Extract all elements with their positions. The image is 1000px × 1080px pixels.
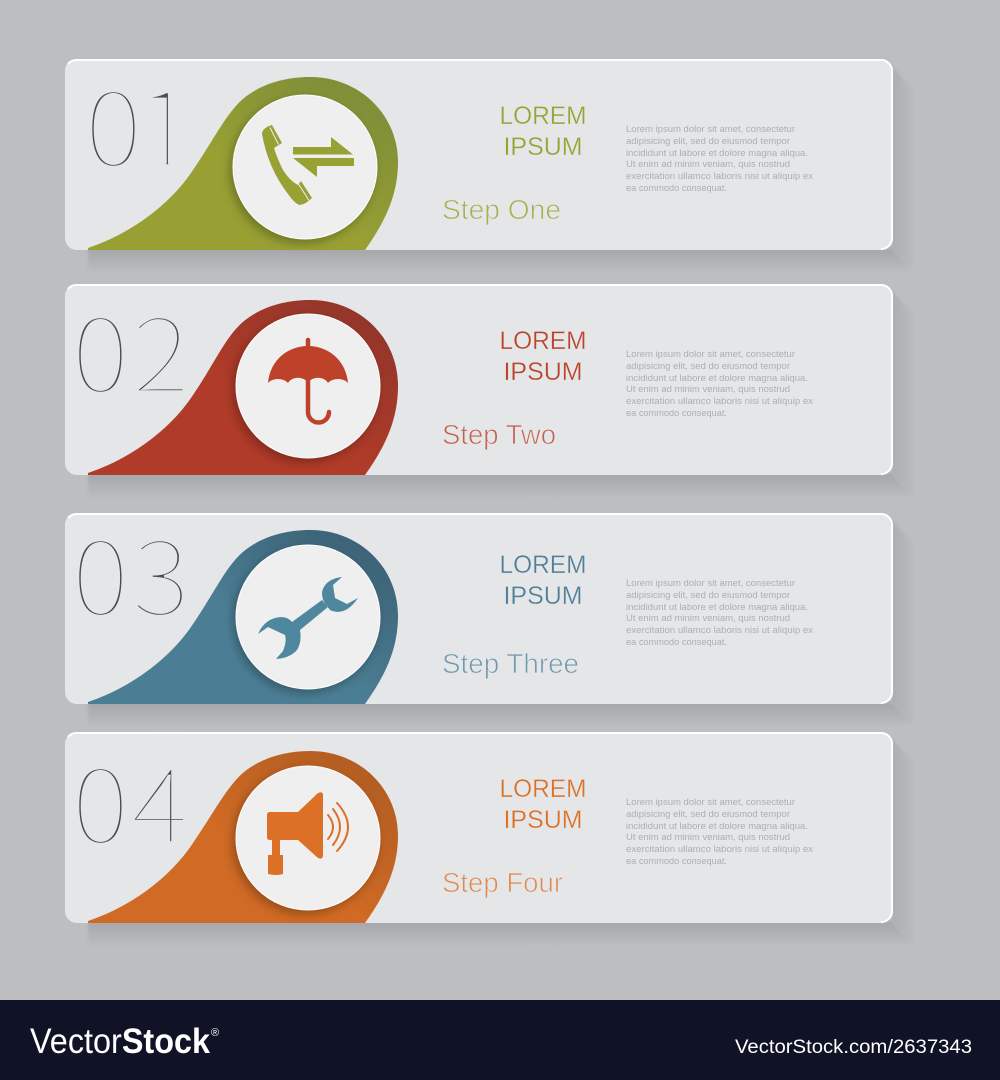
body text: Ut enim ad minim veniam, quis nostrud bbox=[626, 159, 790, 169]
teardrop shape bbox=[88, 77, 398, 250]
body text: ea commodo consequat. bbox=[626, 408, 727, 418]
number 02: 02 bbox=[72, 275, 189, 421]
icon circle bbox=[236, 314, 380, 458]
number 03: 03 bbox=[72, 498, 189, 644]
heading: LOREM bbox=[500, 775, 586, 803]
teardrop shape bbox=[88, 530, 398, 704]
body text: ea commodo consequat. bbox=[626, 856, 727, 866]
body text bbox=[626, 349, 814, 418]
panel: step two card: IPSUM bbox=[504, 358, 582, 386]
body text: Lorem ipsum dolor sit amet, consectetur bbox=[626, 349, 795, 359]
icon circle bbox=[236, 766, 380, 910]
body text: exercitation ullamco laboris nisi ut aliquip ex bbox=[626, 844, 814, 854]
teardrop shape bbox=[88, 300, 398, 475]
body text: Ut enim ad minim veniam, quis nostrud bbox=[626, 832, 790, 842]
step label: Step One bbox=[442, 194, 561, 225]
heading: LOREM bbox=[500, 102, 586, 130]
body text: ea commodo consequat. bbox=[626, 637, 727, 647]
step label: Step Three bbox=[442, 648, 579, 679]
icon: umbrella bbox=[268, 340, 348, 422]
body text: Lorem ipsum dolor sit amet, consectetur bbox=[626, 797, 795, 807]
body text: incididunt ut labore et dolore magna aliqua. bbox=[626, 148, 808, 158]
body text bbox=[626, 578, 814, 647]
number 01: 01 bbox=[85, 49, 194, 195]
registered mark: ® bbox=[211, 1027, 219, 1039]
body text: adipisicing elit, sed do eiusmod tempor bbox=[626, 809, 790, 819]
body text bbox=[626, 124, 814, 193]
teardrop shape bbox=[88, 751, 398, 923]
body text: ea commodo consequat. bbox=[626, 183, 727, 193]
body text: exercitation ullamco laboris nisi ut aliquip ex bbox=[626, 171, 814, 181]
body text: exercitation ullamco laboris nisi ut aliquip ex bbox=[626, 396, 814, 406]
body text: incididunt ut labore et dolore magna aliqua. bbox=[626, 602, 808, 612]
body text: adipisicing elit, sed do eiusmod tempor bbox=[626, 590, 790, 600]
panel: step three card: IPSUM bbox=[504, 582, 582, 610]
panel: step two card bbox=[65, 275, 913, 499]
panel: step one card bbox=[65, 49, 913, 274]
panel: step four card bbox=[65, 726, 913, 947]
body text: Ut enim ad minim veniam, quis nostrud bbox=[626, 613, 790, 623]
icon: wrench bbox=[258, 577, 358, 659]
step label: Step Four bbox=[442, 867, 563, 898]
body text: adipisicing elit, sed do eiusmod tempor bbox=[626, 361, 790, 371]
body text bbox=[626, 797, 814, 866]
body text: incididunt ut labore et dolore magna aliqua. bbox=[626, 373, 808, 383]
footer id: VectorStock.com/2637343 bbox=[735, 1037, 972, 1058]
body text: exercitation ullamco laboris nisi ut aliquip ex bbox=[626, 625, 814, 635]
body text: Ut enim ad minim veniam, quis nostrud bbox=[626, 384, 790, 394]
heading: LOREM bbox=[500, 327, 586, 355]
footer logo: VectorStock bbox=[30, 1022, 210, 1061]
number 04: 04 bbox=[72, 726, 188, 872]
body text: Lorem ipsum dolor sit amet, consectetur bbox=[626, 124, 795, 134]
icon: phone with arrows bbox=[262, 125, 354, 205]
footer bar bbox=[0, 1000, 1000, 1080]
panel: step four card: IPSUM bbox=[504, 806, 582, 834]
body text: incididunt ut labore et dolore magna aliqua. bbox=[626, 821, 808, 831]
body text: Lorem ipsum dolor sit amet, consectetur bbox=[626, 578, 795, 588]
panel: step one card: IPSUM bbox=[504, 133, 582, 161]
body text: adipisicing elit, sed do eiusmod tempor bbox=[626, 136, 790, 146]
icon circle bbox=[233, 95, 377, 239]
heading: LOREM bbox=[500, 551, 586, 579]
panel: step three card bbox=[65, 498, 913, 728]
step label: Step Two bbox=[442, 419, 556, 450]
icon circle bbox=[236, 545, 380, 689]
icon: megaphone bbox=[267, 792, 348, 875]
